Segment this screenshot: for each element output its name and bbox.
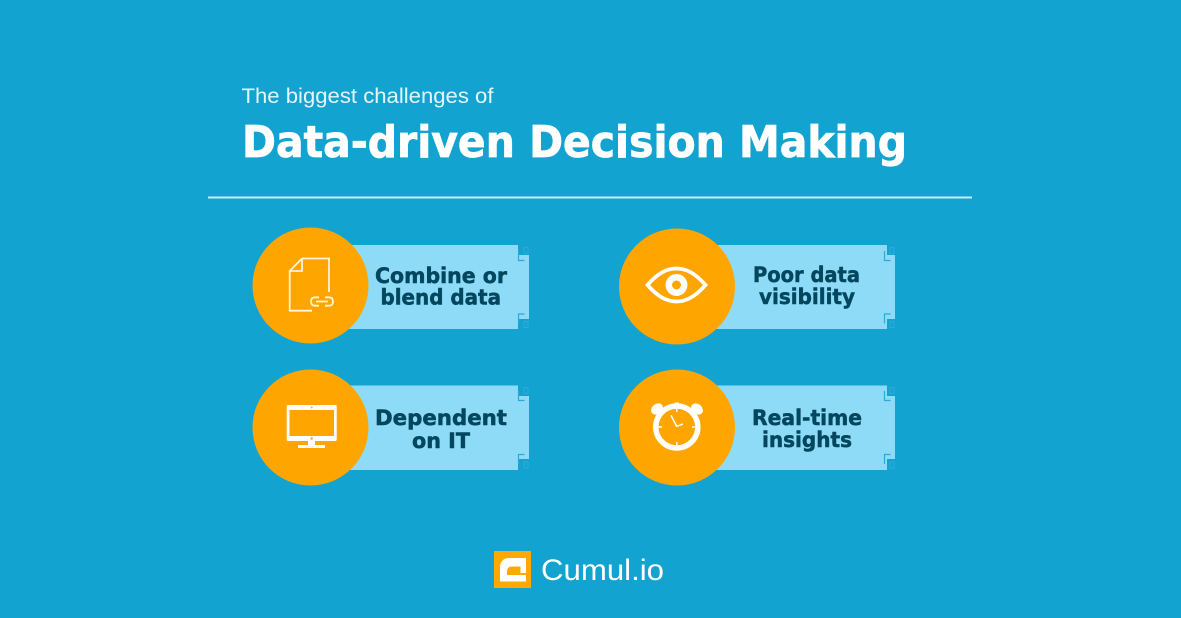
label text: blend data [380, 286, 501, 310]
label box [706, 245, 895, 329]
icon: eye [648, 268, 706, 302]
corner links [884, 388, 894, 468]
corner links [884, 248, 894, 328]
label text [375, 264, 508, 310]
icon: monitor [287, 405, 337, 448]
panel: dependent on IT [252, 370, 529, 486]
subtitle: The biggest challenges of [242, 84, 494, 108]
icon: document with link [290, 258, 333, 311]
circle badge [619, 370, 735, 486]
label text: Dependent [375, 406, 507, 430]
label box [706, 386, 895, 470]
logo: Cumul.io [494, 551, 664, 588]
circle badge [619, 228, 735, 344]
label text: insights [762, 428, 852, 452]
label text: Poor data [753, 263, 860, 287]
panel: poor data visibility [619, 228, 895, 344]
title: Data-driven Decision Making [242, 117, 907, 168]
circle badge [252, 228, 368, 344]
label text [753, 263, 860, 309]
icon: alarm clock [649, 401, 705, 448]
circle badge [252, 370, 368, 486]
label text: Combine or [375, 264, 508, 288]
label text: on IT [412, 429, 471, 453]
corner links [518, 248, 528, 328]
panel: real-time insights [619, 370, 895, 486]
label box [340, 245, 529, 329]
label text [375, 406, 507, 453]
logo mark [494, 551, 531, 588]
panel: combine or blend data [252, 228, 529, 344]
label text [752, 406, 862, 452]
label text: visibility [759, 285, 855, 309]
label text: Real-time [752, 406, 862, 430]
logo wordmark: Cumul.io [541, 554, 664, 587]
label box [340, 386, 529, 470]
corner links [518, 388, 528, 468]
